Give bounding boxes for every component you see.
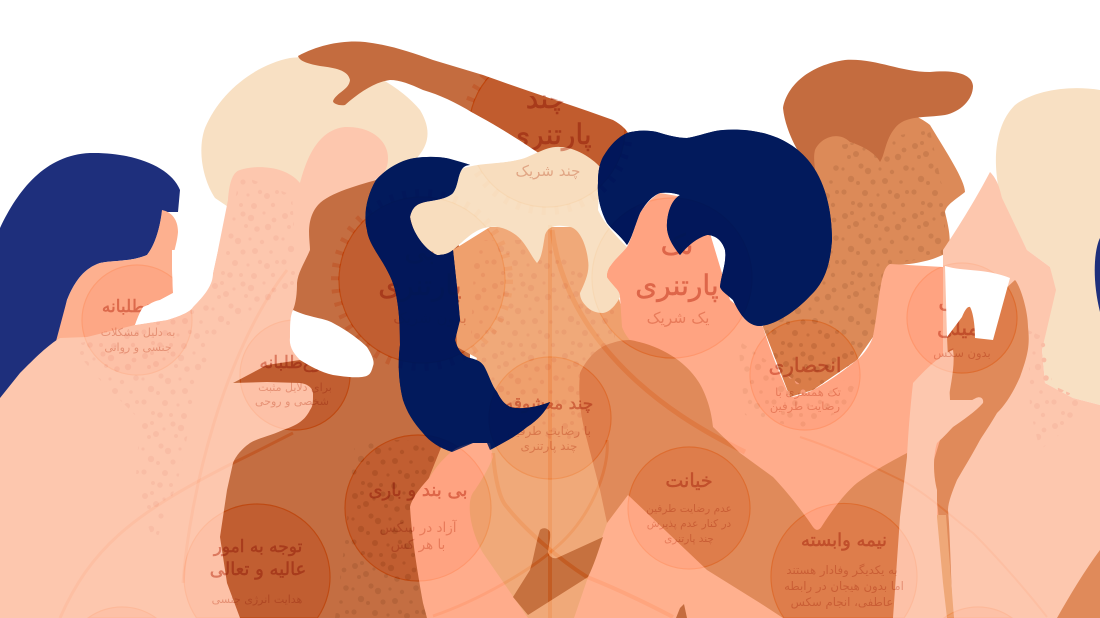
circle: several lovers: چند معشوقه (505, 394, 593, 414)
circle: higher matters: عالیه و تعالی (210, 559, 306, 580)
brown woman body (220, 170, 470, 618)
circle: exclusive: تک همسری با (775, 385, 841, 400)
center woman hand (410, 443, 528, 618)
circle: one partner (592, 198, 752, 358)
man head (740, 111, 965, 397)
circle: many partners: چند شریک (516, 162, 580, 180)
circle: one partner: تک (661, 228, 693, 261)
man chest speckles (738, 340, 860, 428)
circle: left selfish: خودطلبانه (102, 297, 172, 317)
circle: semi dependent: نیمه وابسته (801, 530, 887, 551)
pale arm (893, 350, 983, 618)
circle: infidelity: عدم رضایت طرفین (646, 503, 732, 515)
circle: many partners: پارتنری (508, 118, 592, 151)
circle: asexual: بدون سکس (933, 346, 991, 361)
wrist stripe speckles (936, 515, 954, 618)
blonde hair (201, 57, 428, 215)
circle: infidelity (628, 447, 750, 569)
man stubble speckles (763, 130, 945, 397)
right person hair (996, 88, 1100, 405)
man dark hair (598, 130, 832, 326)
circle: one partner: یک شریک (647, 309, 709, 327)
circle: asexual (907, 263, 1017, 373)
circle: left selfish: جنسی و روانی (104, 341, 172, 354)
bottom spike (676, 604, 687, 618)
drinking hand (933, 280, 1029, 618)
left woman hair (0, 153, 180, 400)
sun spikes around partner circles (335, 47, 629, 367)
circle: altruistic (240, 320, 350, 430)
circle: semi dependent: به یکدیگر وفادار هستند (786, 563, 898, 578)
circle: left selfish (82, 265, 192, 375)
circle: promiscuity: آزاد در سکس (379, 519, 458, 536)
man body and face (600, 193, 1000, 618)
circle: asexual: بی (938, 289, 962, 313)
circle: several lovers: با رضایت طرفین (507, 424, 591, 439)
white below raised arm (432, 113, 537, 164)
man hair (783, 60, 973, 172)
far right hair edge (1095, 238, 1100, 312)
circle: semi dependent: عاطفی، انجام سکس (791, 595, 893, 610)
circle: semi dependent (771, 503, 917, 618)
right person speckles (1028, 330, 1085, 450)
center woman blonde hair (410, 147, 627, 313)
partial circles at bottom edge (88, 607, 1012, 618)
man shoulders (579, 340, 907, 618)
figure: brown woman (220, 170, 470, 618)
blonde speckles (70, 175, 298, 545)
circle: promiscuity: بی بند و باری (368, 480, 468, 501)
circle: semi dependent: اما بدون هیجان در رابطه (784, 579, 904, 594)
small brown hand (513, 528, 603, 615)
circle: no partner: بدون شریک (393, 309, 467, 327)
circle: altruistic: شخصی و روحی (255, 395, 329, 408)
circle: higher matters: هدایت انرژی جنسی (212, 593, 303, 606)
circle: left selfish: به دلیل مشکلات (101, 326, 175, 339)
circle: altruistic: نوع‌طلبانه (260, 353, 326, 373)
circle: many partners: چند (526, 82, 566, 115)
circle: altruistic: برای دلایل مثبت (258, 381, 332, 394)
man dark hair veil (598, 130, 832, 326)
diagram connecting lines (60, 225, 1047, 618)
circle: higher matters: توجه به امور (213, 537, 303, 557)
white above raised arm (483, 60, 613, 119)
circle: infidelity: در کنار عدم پذیرش (647, 518, 732, 530)
circle: exclusive: انحصاری (769, 353, 841, 377)
circle: higher matters (184, 504, 330, 618)
circle: asexual: میلی (937, 316, 979, 340)
center woman dark hair veil (365, 157, 550, 452)
white gap by the lips (290, 310, 374, 377)
dark hair veils over the diagram (365, 130, 832, 452)
white gap beside left woman (135, 250, 218, 325)
center torso speckles (470, 240, 615, 455)
raised arm (298, 42, 628, 185)
left woman face and neck (55, 210, 178, 345)
circle: infidelity: چند پارتنری (664, 533, 714, 545)
circle: promiscuity: با هر کس (391, 537, 445, 553)
circle: no partner: بی (404, 234, 436, 267)
circle: no partner: پارتنری (378, 269, 462, 302)
center torso (420, 227, 630, 618)
figure: left woman (0, 153, 180, 618)
arm speckles (18, 585, 60, 618)
white gaps on top (135, 60, 1010, 377)
blonde body (0, 127, 388, 618)
circle: promiscuity (345, 435, 491, 581)
right person body (943, 172, 1100, 618)
figure: right person (893, 88, 1100, 618)
circle: several lovers: چند پارتنری (521, 439, 577, 454)
figure: center woman (365, 147, 630, 618)
circle: several lovers (489, 357, 611, 479)
figure: blonde person (0, 57, 428, 618)
circle: infidelity: خیانت (665, 470, 713, 492)
left woman arm (0, 450, 53, 618)
brown woman speckles (335, 440, 440, 618)
man arm lower peach (574, 495, 783, 618)
figure: man (574, 60, 1000, 618)
center woman dark hair (365, 157, 550, 452)
right bottom shoulder (1057, 550, 1100, 618)
circle: one partner: پارتنری (635, 269, 719, 302)
circle: many partners (469, 51, 625, 207)
white mug (945, 266, 1010, 340)
circle: exclusive (750, 320, 860, 430)
circle: no partner (339, 197, 505, 363)
circle: exclusive: رضایت طرفین (770, 399, 840, 414)
